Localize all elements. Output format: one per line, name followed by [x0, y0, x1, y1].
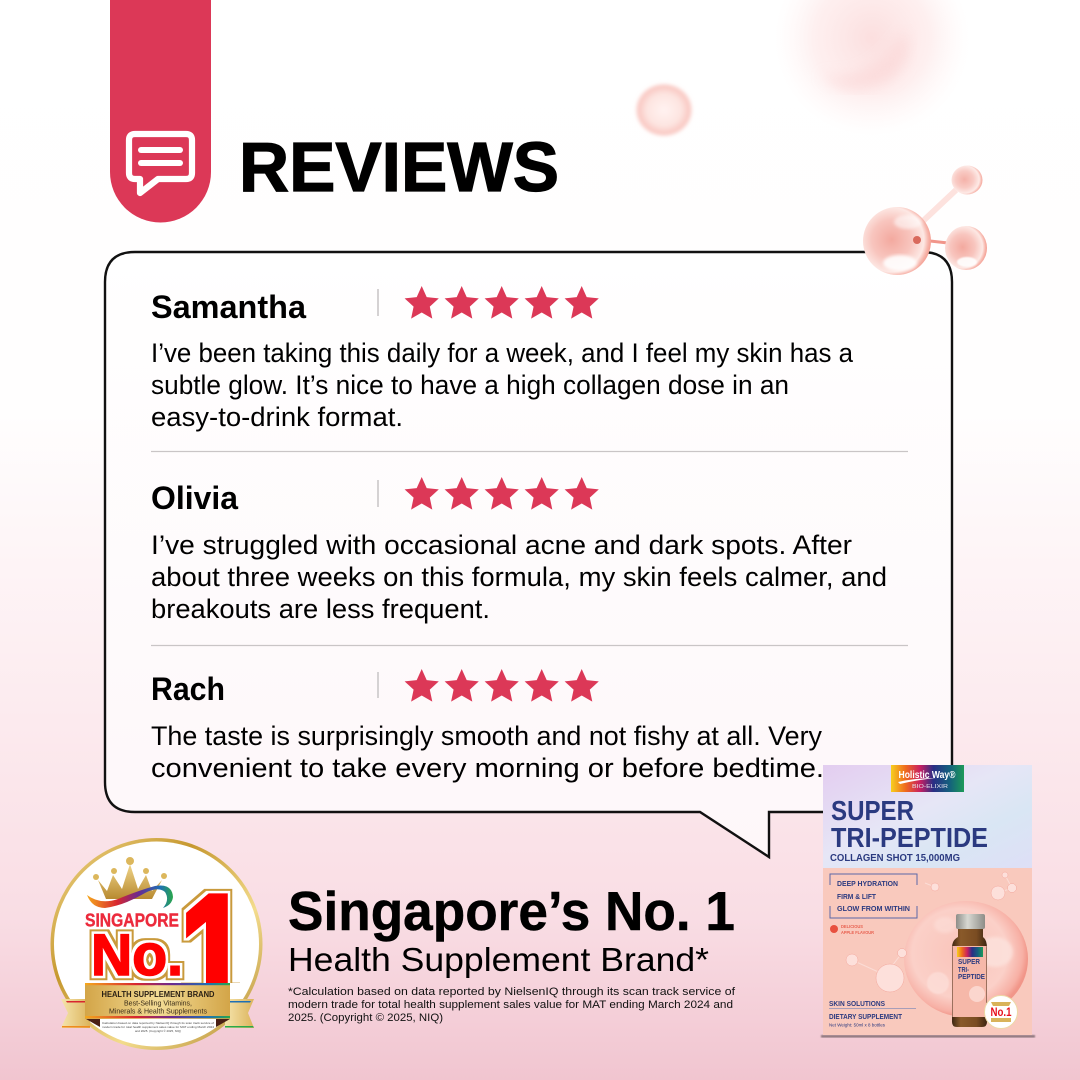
review text: about three weeks on this formula, my skin feels calmer, and: [151, 562, 887, 592]
product bottle: [952, 914, 987, 1027]
product box: [821, 765, 1035, 1038]
product bottle: SUPER: [958, 959, 980, 966]
review text: convenient to take every morning or before bedtime.: [151, 753, 824, 783]
badge: Singapore No. 1: [50, 838, 262, 1050]
box footer text: SKIN SOLUTIONS: [829, 1001, 885, 1008]
product title: SUPER: [831, 795, 914, 826]
review text: [151, 721, 824, 783]
badge text No.: No.: [91, 923, 183, 988]
box shadow: [821, 1035, 1035, 1038]
star rating: [405, 669, 599, 702]
review text: The taste is surprisingly smooth and not fishy at all. Very: [151, 721, 822, 751]
badge text SINGAPORE: SINGAPORE: [85, 910, 179, 930]
benefit list: FIRM & LIFT: [837, 892, 877, 901]
footnote: 2025. (Copyright © 2025, NIQ): [288, 1012, 443, 1024]
footnote: *Calculation based on data reported by NielsenIQ through its scan track service of: [288, 986, 736, 998]
box footer text: Net Weight: 50ml x 8 bottles: [829, 1022, 886, 1028]
review text: breakouts are less frequent.: [151, 594, 490, 624]
review text: I’ve been taking this daily for a week, and I feel my skin has a: [151, 338, 854, 368]
footnote: modern trade for total health supplement sales value for MAT ending March 2024 and: [288, 999, 733, 1011]
apple flavour note: DELICIOUS: [841, 924, 864, 930]
brand claim subheading: Health Supplement Brand*: [288, 941, 709, 978]
benefit list: DEEP HYDRATION: [837, 879, 898, 888]
brand logo: Holistic Way®: [898, 770, 956, 781]
ribbon band with text: Best-Selling Vitamins,: [124, 1000, 192, 1008]
review text: [151, 338, 854, 432]
review: Olivia: [151, 477, 887, 624]
brand claim heading: Singapore’s No. 1: [288, 880, 735, 942]
ribbon band with text: [85, 983, 230, 1019]
box top panel: [823, 765, 1032, 868]
apple flavour note: APPLE FLAVOUR: [841, 930, 874, 936]
review text: [151, 530, 887, 624]
review text: I’ve struggled with occasional acne and dark spots. After: [151, 530, 852, 560]
star rating: [405, 286, 599, 319]
crown: [87, 857, 173, 908]
product title: TRI-PEPTIDE: [831, 822, 988, 853]
badge fine print: Calculation based on data reported by NielsenIQ through its scan track service of: [102, 1021, 214, 1025]
ribbon band with text: HEALTH SUPPLEMENT BRAND: [102, 989, 214, 999]
decorative blurred droplet top right: [775, 0, 969, 135]
badge fine print: and 2025. (Copyright © 2025, NIQ): [135, 1029, 181, 1033]
review text: subtle glow. It’s nice to have a high collagen dose in an: [151, 370, 789, 400]
reviewer name: Olivia: [151, 480, 238, 516]
reviewer name: Rach: [151, 671, 225, 707]
icon: speech bubble: [129, 134, 192, 193]
product title: [830, 795, 988, 864]
heading: REVIEWS: [239, 128, 559, 206]
small molecules: [846, 872, 1016, 992]
decorative droplet: [635, 83, 693, 137]
ribbon tails: [61, 999, 254, 1028]
badge fine print: [102, 1021, 214, 1033]
brand logo: [891, 765, 964, 792]
product bottle: PEPTIDE: [958, 974, 985, 981]
reviewer name: Samantha: [151, 289, 306, 325]
review text: easy-to-drink format.: [151, 402, 403, 432]
badge numeral 1: 1: [180, 862, 248, 1041]
molecule decoration: [863, 166, 987, 275]
box lower panel: [823, 868, 1032, 1035]
brand logo: BIO-ELIXIR: [912, 784, 948, 790]
mini badge: [984, 996, 1018, 1028]
benefit list: [830, 874, 917, 918]
box footer text: DIETARY SUPPLEMENT: [829, 1014, 903, 1021]
speech bubble card: [105, 252, 952, 857]
header ribbon with chat icon: [110, 0, 211, 222]
review: Rach: [151, 669, 824, 783]
product title: COLLAGEN SHOT 15,000MG: [830, 852, 960, 864]
large collagen bubble: [904, 901, 1028, 1017]
benefit list: GLOW FROM WITHIN: [837, 904, 910, 913]
box footer text: [829, 1001, 916, 1028]
footnote: [288, 986, 736, 1024]
ribbon band with text: Minerals & Health Supplements: [109, 1008, 207, 1016]
review: Samantha: [151, 286, 854, 432]
product bottle: TRI-: [958, 967, 970, 974]
apple flavour note: [830, 924, 874, 936]
star rating: [405, 477, 599, 510]
mini badge: No.1: [990, 1005, 1012, 1019]
badge fine print: modern trade for total health supplement sales value for MAT ending March 2024: [102, 1025, 214, 1029]
